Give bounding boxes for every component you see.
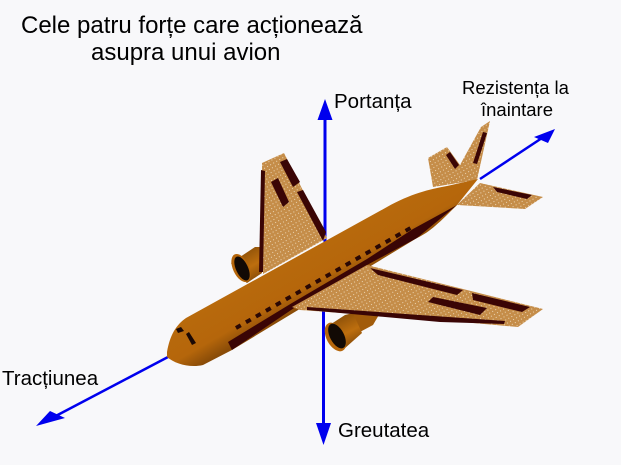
cabin windows bbox=[236, 226, 414, 328]
labels: Portanța bbox=[334, 90, 412, 113]
title bbox=[21, 12, 363, 66]
fuselage bbox=[167, 179, 478, 366]
labels: Greutatea bbox=[338, 419, 430, 442]
label: drag bbox=[462, 77, 570, 120]
labels: Tracțiunea bbox=[2, 367, 99, 390]
lower engine bbox=[320, 313, 380, 355]
lower wing bbox=[292, 265, 543, 327]
arrow: drag bbox=[480, 129, 555, 179]
title: Cele patru forțe care acționează bbox=[21, 12, 363, 39]
cockpit windows bbox=[176, 327, 196, 345]
title: asupra unui avion bbox=[91, 39, 280, 66]
label: drag: Rezistența la bbox=[462, 77, 570, 98]
label: drag: înaintare bbox=[480, 99, 553, 120]
arrow: thrust bbox=[36, 357, 168, 426]
arrow: lift bbox=[318, 99, 332, 246]
tail stabilizer bbox=[457, 183, 543, 209]
upper engine bbox=[227, 247, 262, 285]
upper wing bbox=[259, 153, 327, 274]
tail fin bbox=[428, 121, 490, 187]
arrow: weight bbox=[316, 305, 331, 445]
labels bbox=[2, 90, 430, 442]
